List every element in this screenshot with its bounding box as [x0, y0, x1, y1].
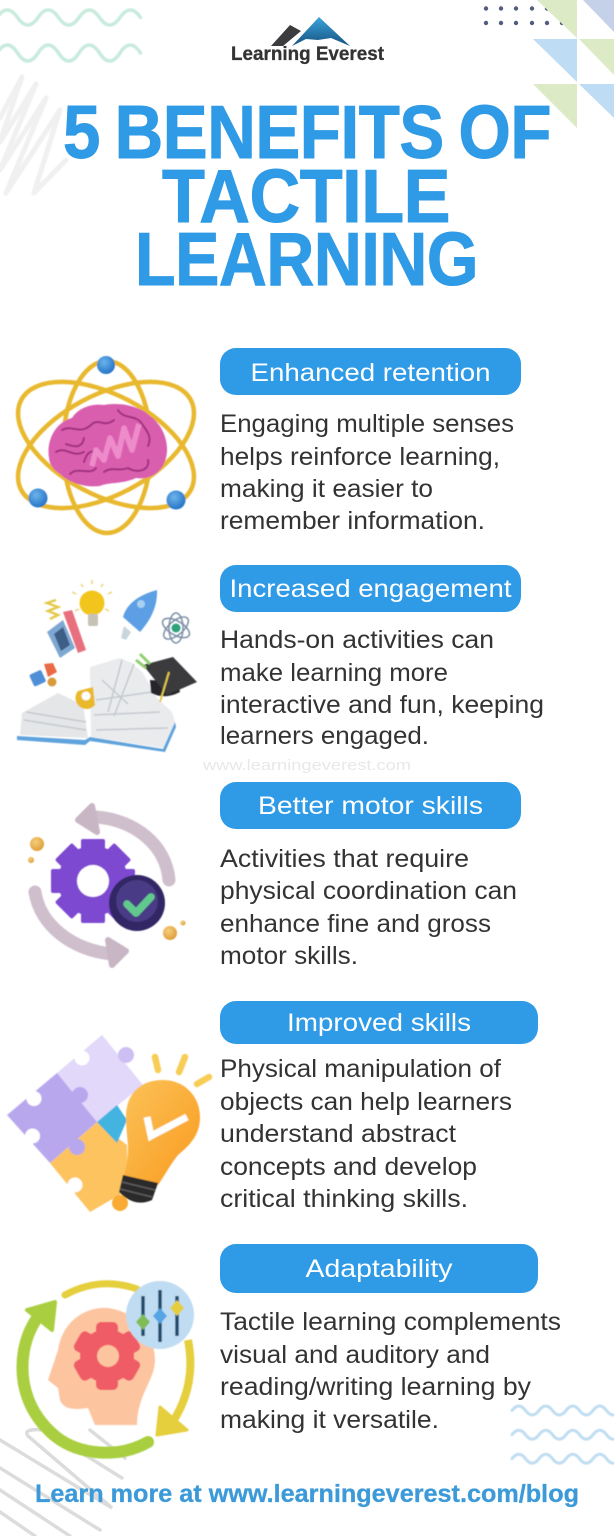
decoration: dot grid: [484, 6, 564, 25]
pill: Adaptability: Adaptability: [306, 1255, 453, 1283]
text: better motor skills description: [220, 845, 517, 970]
text: better motor skills description: Activities that require: [220, 845, 469, 873]
text: increased engagement description: [220, 626, 544, 750]
text: improved skills description: understand abstract: [220, 1120, 456, 1148]
icon: gear with checkmark and arrows: [28, 806, 186, 965]
logo: Learning Everest: [231, 17, 385, 65]
decoration: top-left waves: [0, 10, 140, 61]
text: adaptability description: Tactile learning complements: [220, 1308, 561, 1336]
pill: Increased engagement: Increased engagement: [230, 575, 512, 603]
pill: Better motor skills: Better motor skills: [258, 792, 483, 820]
text: improved skills description: [220, 1055, 512, 1213]
text: adaptability description: reading/writing learning by: [220, 1373, 532, 1401]
icon: brain in atom orbits: [0, 356, 214, 534]
text: enhanced retention description: [220, 410, 514, 535]
pill: Enhanced retention: [220, 348, 521, 395]
text: improved skills description: concepts and develop: [220, 1153, 477, 1181]
pill: Better motor skills: [220, 782, 521, 829]
decoration: top-left scribble: [0, 77, 66, 193]
footer link: Learn more at www.learningeverest.com/blog: [35, 1480, 579, 1508]
icon: puzzle and light bulb: [7, 1035, 209, 1212]
text: enhanced retention description: remember information.: [220, 507, 485, 535]
text: increased engagement description: interactive and fun, keeping: [220, 691, 544, 719]
pill: Improved skills: Improved skills: [287, 1009, 471, 1037]
title: LEARNING: [135, 217, 478, 301]
text: increased engagement description: make learning more: [220, 659, 448, 687]
pill: Enhanced retention: Enhanced retention: [250, 359, 490, 387]
title: 5 BENEFITS OF: [63, 90, 551, 174]
title: TACTILE: [162, 154, 450, 238]
text: increased engagement description: learners engaged.: [220, 722, 429, 750]
text: improved skills description: critical thinking skills.: [220, 1185, 468, 1213]
pill: Adaptability: [220, 1244, 538, 1293]
text: enhanced retention description: helps reinforce learning,: [220, 443, 500, 471]
pill: Improved skills: [220, 1001, 538, 1044]
text: enhanced retention description: Engaging multiple senses: [220, 410, 514, 438]
icon: open book with science objects: [17, 580, 197, 752]
watermark: www.learningeverest.com: [202, 757, 411, 774]
title: [63, 90, 551, 301]
text: better motor skills description: motor skills.: [220, 942, 358, 970]
pill: Increased engagement: [220, 565, 521, 612]
text: improved skills description: Physical manipulation of: [220, 1055, 501, 1083]
text: adaptability description: visual and auditory and: [220, 1341, 490, 1369]
decoration: bottom-right waves: [512, 1406, 614, 1463]
text: improved skills description: objects can help learners: [220, 1088, 512, 1116]
text: enhanced retention description: making it easier to: [220, 475, 433, 503]
decoration: bottom-left scribble: [0, 1430, 125, 1536]
text: adaptability description: making it versatile.: [220, 1406, 439, 1434]
text: better motor skills description: enhance fine and gross: [220, 910, 491, 938]
text: increased engagement description: Hands-on activities can: [220, 626, 494, 654]
text: better motor skills description: physical coordination can: [220, 877, 517, 905]
text: adaptability description: [220, 1308, 561, 1434]
logo: Learning Everest: Learning Everest: [231, 44, 385, 65]
icon: head with gear and sliders: [22, 1281, 194, 1453]
decoration: corner triangles: [533, 0, 614, 128]
